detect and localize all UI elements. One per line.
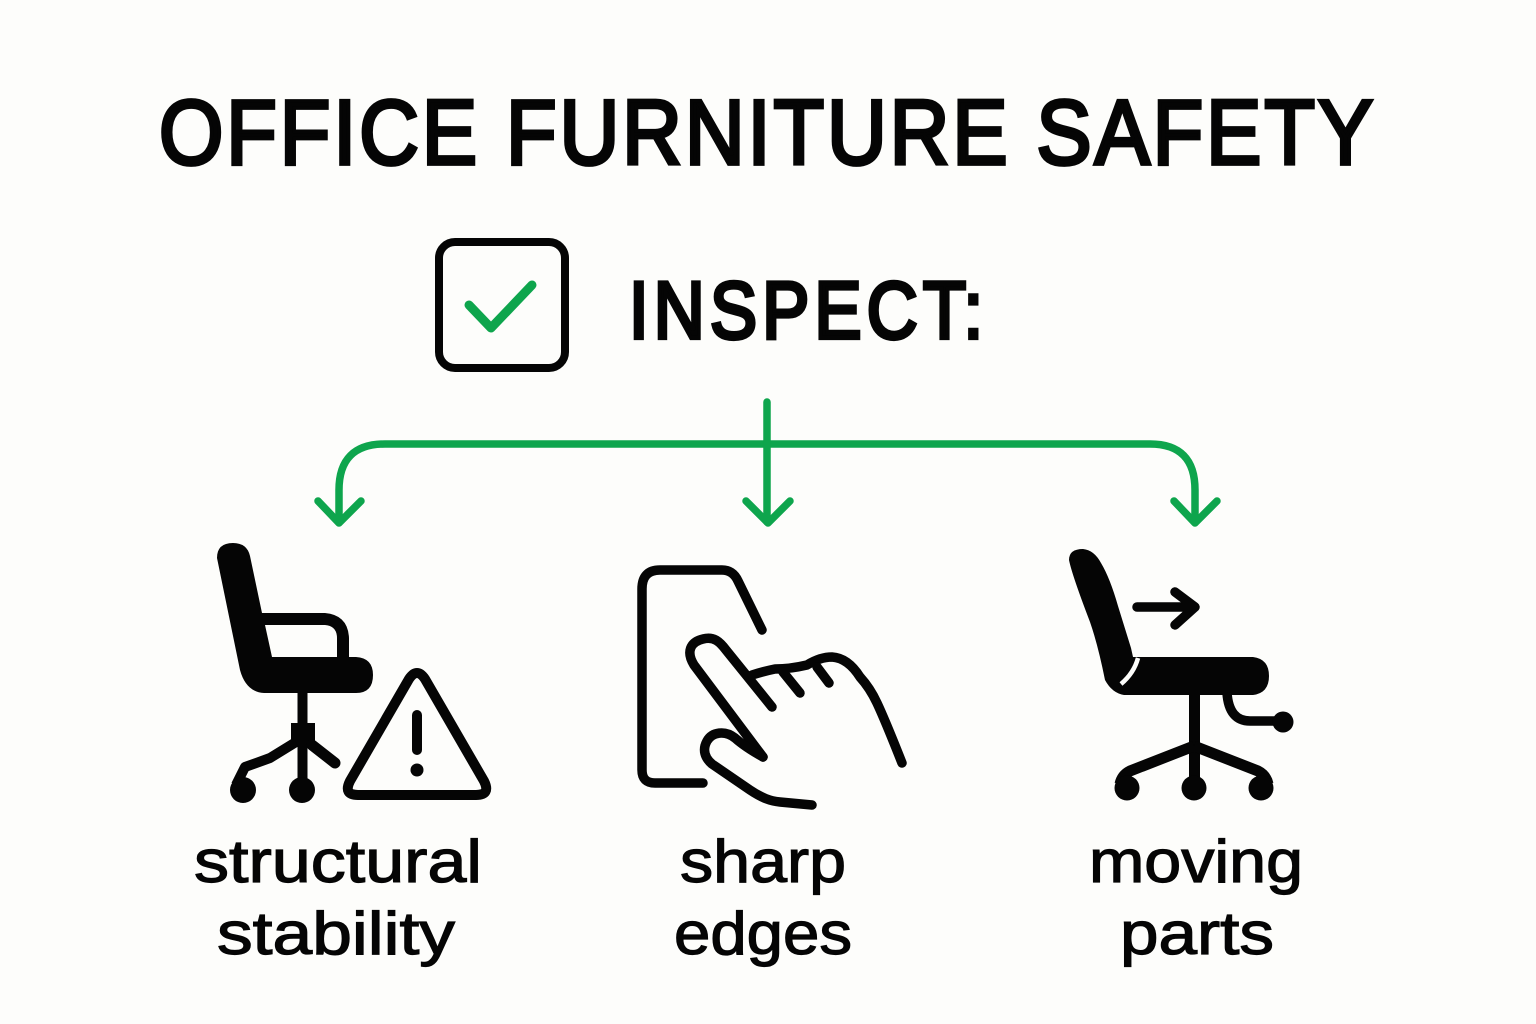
label: sharp edges: edges (674, 900, 852, 967)
icon: warning triangle (348, 673, 486, 795)
icon: chair with moving parts (1069, 549, 1294, 800)
label: sharp edges (674, 828, 852, 967)
icon: small right arrow (1137, 592, 1195, 625)
label: structural stability: structural (194, 828, 482, 895)
icon: green checkbox (439, 242, 565, 368)
label: moving parts: parts (1120, 900, 1274, 967)
title: OFFICE FURNITURE SAFETY (159, 81, 1373, 184)
label: moving parts (1089, 828, 1303, 967)
label: sharp edges: sharp (680, 828, 846, 895)
icon: hand touching sharp edge (642, 570, 902, 805)
arrows: branching connector (318, 402, 1217, 523)
heading: inspect: INSPECT: (629, 265, 983, 356)
label: structural stability (194, 828, 482, 967)
icon: chair with warning (217, 543, 486, 803)
label: moving parts: moving (1089, 828, 1303, 895)
label: structural stability: stability (217, 900, 455, 967)
